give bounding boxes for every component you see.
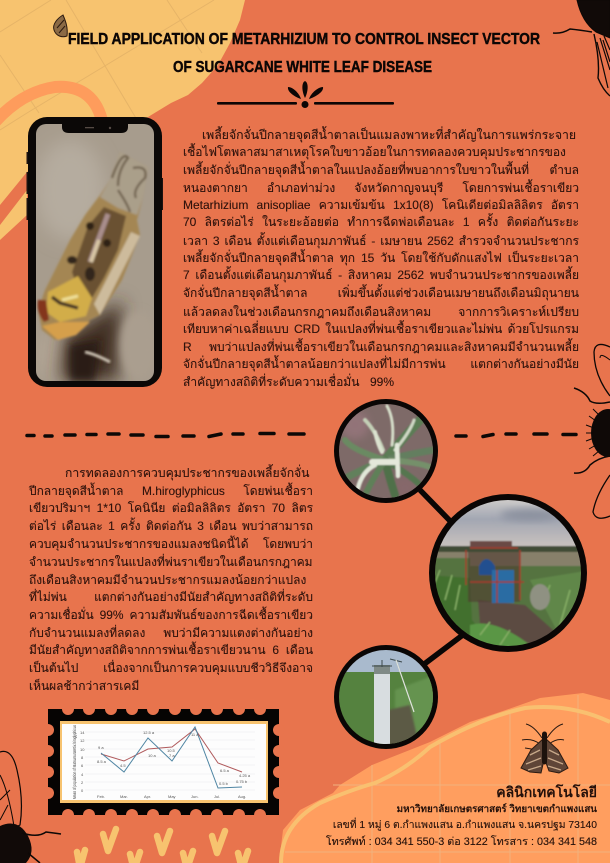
chart labels: 7 a xyxy=(169,753,175,758)
bottom-right light orange shape xyxy=(279,693,610,863)
footer contact block: คลินิกเทคโนโลยี xyxy=(496,784,597,800)
main paragraph about leafhopper population trial: เชื้อไฟโตพลาสมาสาเหตุโรคใบขาวอ้อยในการทดลองควบคุมประชากรของ xyxy=(183,145,566,159)
title ornament xyxy=(217,81,394,108)
top-left yellow paper shape xyxy=(0,0,245,240)
main paragraph about leafhopper population trial: เวลา 3 เดือน ตั้งแต่เดือนกุมภาพันธ์ - เมษายน 2562 สำรวจจำนวนประชากร xyxy=(183,234,579,248)
chart labels: Jul. xyxy=(214,794,220,799)
second paragraph about M. hiroglyphicus control: ต่อไร่ เดือนละ 1 ครั้ง ติดต่อกัน 3 เดือน พบว่าสามารถ xyxy=(29,519,313,533)
chart labels: Jun. xyxy=(191,794,199,799)
chart labels: 14 xyxy=(80,730,85,735)
chart labels: 12 xyxy=(80,738,85,743)
icon: moth xyxy=(521,724,568,773)
yellow check marks xyxy=(77,829,248,863)
chart labels: Feb. xyxy=(97,794,105,799)
chart labels: 10.5 xyxy=(167,748,176,753)
main paragraph about leafhopper population trial: แล้วลดลงในช่วงเดือนกรกฎาคมถึงเดือนสิงหาคม จากการวิเคราะห์เปรียบ xyxy=(183,305,579,319)
main paragraph about leafhopper population trial: จักจั่นปีกลายจุดสีน้ำตาลน้อยกว่าแปลงที่ไม่มีการพ่น แตกต่างกันอย่างมีนัย xyxy=(183,357,579,371)
icon: bottom-left fly xyxy=(0,751,61,863)
main paragraph about leafhopper population trial: 7 เดือนตั้งแต่เดือนกุมภาพันธ์ - สิงหาคม 2562 พบจำนวนประชากรของเพลี้ย xyxy=(183,268,579,282)
chart labels: 4.5 xyxy=(120,763,126,768)
chart labels: Mean of population of Matsumuratettix hiroglyphicus xyxy=(72,725,77,799)
chart labels: 9 a xyxy=(98,745,104,750)
phone mockup with leafhopper photo xyxy=(26,117,163,387)
second paragraph about M. hiroglyphicus control: ควบคุมจำนวนประชากรของแมลงชนิดนี้ได้ โดยพบว่า xyxy=(29,537,313,551)
footer contact block xyxy=(326,784,597,848)
photo circle: light trap in cane field xyxy=(334,645,438,752)
footer contact block: โทรศัพท์ : 034 341 550-3 ต่อ 3122 โทรสาร : 034 341 548 xyxy=(326,836,597,848)
icon: right-side fly xyxy=(574,344,610,518)
chart labels: 4.25 a xyxy=(239,773,251,778)
icon: butterfly xyxy=(54,15,67,37)
title: FIELD APPLICATION OF METARHIZIUM TO CONTROL INSECT VECTOR xyxy=(68,31,540,48)
connector lines between photos xyxy=(420,490,472,665)
second paragraph about M. hiroglyphicus control: ความเชื่อมั่น 99% ความสัมพันธ์ของการฉีดเชื้อราเขียว xyxy=(29,608,313,622)
main paragraph about leafhopper population trial xyxy=(183,126,579,389)
second paragraph about M. hiroglyphicus control: เป็นต้นไป เนื่องจากเป็นการควบคุมแบบชีววิธีจึงอาจ xyxy=(29,661,313,675)
footer contact block: เลขที่ 1 หมู่ 6 ต.กำแพงแสน อ.กำแพงแสน จ.นครปฐม 73140 xyxy=(333,820,597,831)
second paragraph about M. hiroglyphicus control: ที่ไม่พ่น แตกต่างกันอย่างมีนัยสำคัญทางสถิติที่ระดับ xyxy=(29,590,313,604)
line chart in stamp frame xyxy=(42,703,285,821)
chart labels: 10 a xyxy=(148,753,157,758)
main paragraph about leafhopper population trial: เพลี้ยจักจั่นปีกลายจุดสีน้ำตาลเป็นแมลงพาหะที่สำคัญในการแพร่กระจาย xyxy=(202,128,576,142)
chart labels: 11 a xyxy=(191,732,199,737)
main paragraph about leafhopper population trial: เพลี้ยจักจั่นปีกลายจุดสีน้ำตาล ทุก 15 วัน โดยใช้กับดักแสงไฟ เป็นระยะเวลา xyxy=(183,251,579,265)
chart labels: May xyxy=(168,794,176,799)
main paragraph about leafhopper population trial: สำคัญทางสถิติที่ระดับความเชื่อมั่น 99% xyxy=(183,375,394,389)
second paragraph about M. hiroglyphicus control: กับจำนวนแมลงที่ลดลง พบว่ามีความแตงต่างกันอย่าง xyxy=(29,626,313,640)
dashed divider right xyxy=(456,434,576,436)
main paragraph about leafhopper population trial: เพลี้ยจักจั่นปีกลายจุดสีน้ำตาลในแปลงอ้อยที่พบอาการใบขาวในพื้นที่ ตำบล xyxy=(183,163,579,177)
second paragraph about M. hiroglyphicus control: มีนัยสำคัญทางสถิติจากการพ่นเชื้อราเขียวนาน 6 เดือน xyxy=(29,643,313,657)
dashed divider left xyxy=(27,434,304,436)
footer contact block: มหาวิทยาลัยเกษตรศาสตร์ วิทยาเขตกำแพงแสน xyxy=(397,804,597,815)
main paragraph about leafhopper population trial: R พบว่าแปลงที่พ่นเชื้อราเขียวในเดือนกรกฎาคมและสิงหาคมมีจำนวนเพลี้ย xyxy=(183,340,579,354)
chart labels: 6 xyxy=(81,763,84,768)
main paragraph about leafhopper population trial: Metarhizium anisopliae ความเข้มข้น 1x10(8) โคนิเดียต่อมิลลิลิตร อัตรา xyxy=(183,198,579,212)
chart labels: Mar. xyxy=(120,794,128,799)
title xyxy=(68,31,540,76)
chart labels: Aug. xyxy=(238,794,246,799)
chart labels: 10 xyxy=(80,747,85,752)
chart labels: 2 xyxy=(81,780,84,785)
second paragraph about M. hiroglyphicus control: ปีกลายจุดสีน้ำตาล M.hiroglyphicus โดยพ่นเชื้อรา xyxy=(29,484,313,498)
photo circle: tractor spraying field xyxy=(428,493,592,652)
main paragraph about leafhopper population trial: หนองตากยา อำเภอท่าม่วง จังหวัดกาญจนบุรี โดยการพ่นเชื้อราเขียว xyxy=(183,181,579,195)
main paragraph about leafhopper population trial: จักจั่นปีกลายจุดสีน้ำตาล เพิ่มขึ้นตั้งแต่ช่วงเดือนเมษายนถึงเดือนมิถุนายน xyxy=(183,286,579,300)
chart labels: 8.5 a xyxy=(97,759,107,764)
stamp frame xyxy=(42,703,285,821)
chart gridlines and lines xyxy=(85,727,255,790)
chart labels: 12.5 a xyxy=(143,730,155,735)
leafhopper photo xyxy=(35,124,156,381)
chart labels: 0 xyxy=(81,788,84,793)
second paragraph about M. hiroglyphicus control: เขียวปริมาฯ 1*10 โคนินีย ต่อมิลลิลิตร อัตรา 70 ลิตร xyxy=(29,501,313,515)
chart labels: 4 xyxy=(81,772,84,777)
chart labels: Apr. xyxy=(144,794,151,799)
chart labels: 6.5 a xyxy=(220,768,230,773)
second paragraph about M. hiroglyphicus control: เห็นผลช้ากว่าสารเคมี xyxy=(29,679,139,693)
title: OF SUGARCANE WHITE LEAF DISEASE xyxy=(173,59,432,76)
chart labels: 0.5 b xyxy=(219,781,229,786)
photo circle: diseased sugarcane plant xyxy=(334,399,438,503)
chart labels xyxy=(72,725,251,799)
chart labels: 8 xyxy=(81,755,84,760)
main paragraph about leafhopper population trial: 70 ลิตรต่อไร่ ในระยะอ้อยต่อ ทำการฉีดพ่อเดือนละ 1 ครั้ง ติดต่อกันระยะ xyxy=(183,215,579,229)
chart labels: 0.75 b xyxy=(236,779,248,784)
second paragraph about M. hiroglyphicus control: จำนวนประชากรในแปลงที่พ่นราเขียวในเดือนกรกฎาคม xyxy=(29,555,313,569)
second paragraph about M. hiroglyphicus control: ถึงเดือนสิงหาคมมีจำนวนประชากรแมลงน้อยกว่าแปลง xyxy=(29,573,306,587)
second paragraph about M. hiroglyphicus control: การทดลองการควบคุมประชากรของเพลี้ยจักจั่น xyxy=(65,466,309,480)
icon: top-right fly xyxy=(553,0,610,96)
main paragraph about leafhopper population trial: เทียบหาค่าเฉลี่ยแบบ CRD ในแปลงที่พ่นเชื้อราเขียวและไม่พ่น ด้วยโปรแกรม xyxy=(183,322,579,336)
